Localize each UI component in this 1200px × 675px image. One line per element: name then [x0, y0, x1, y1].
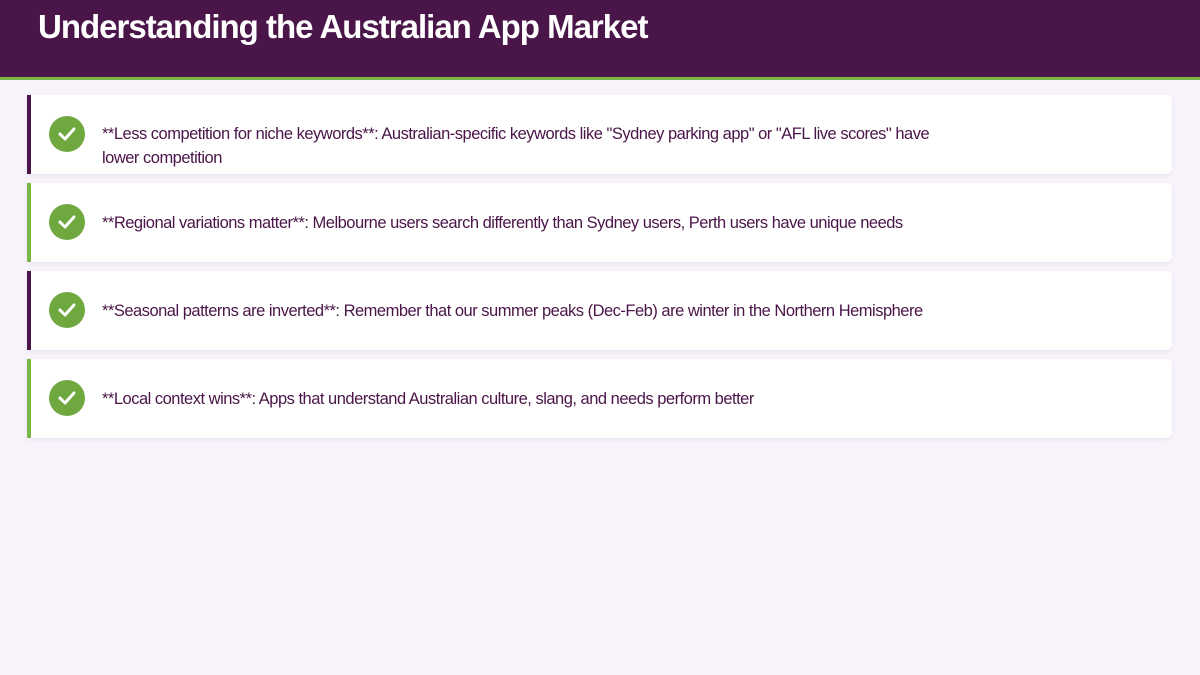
card 2 [27, 183, 1172, 262]
icon: check [49, 116, 85, 152]
header [0, 0, 1200, 80]
card 1 [27, 95, 1172, 174]
card 3 [27, 271, 1172, 350]
text: **Less competition for niche keywords**: Australian-specific keywords like "Sydney parking app" or "AFL live scores" have lower competition [102, 125, 929, 167]
text: **Regional variations matter**: Melbourne users search differently than Sydney users, Perth users have unique needs [102, 214, 903, 232]
text: **Seasonal patterns are inverted**: Remember that our summer peaks (Dec-Feb) are winter in the Northern Hemisphere [102, 302, 923, 320]
text: **Local context wins**: Apps that understand Australian culture, slang, and needs perform better [102, 390, 754, 408]
title: Understanding the Australian App Market [38, 8, 647, 45]
card 4 [27, 359, 1172, 438]
icon: check [49, 204, 85, 240]
icon: check [49, 292, 85, 328]
icon: check [49, 380, 85, 416]
